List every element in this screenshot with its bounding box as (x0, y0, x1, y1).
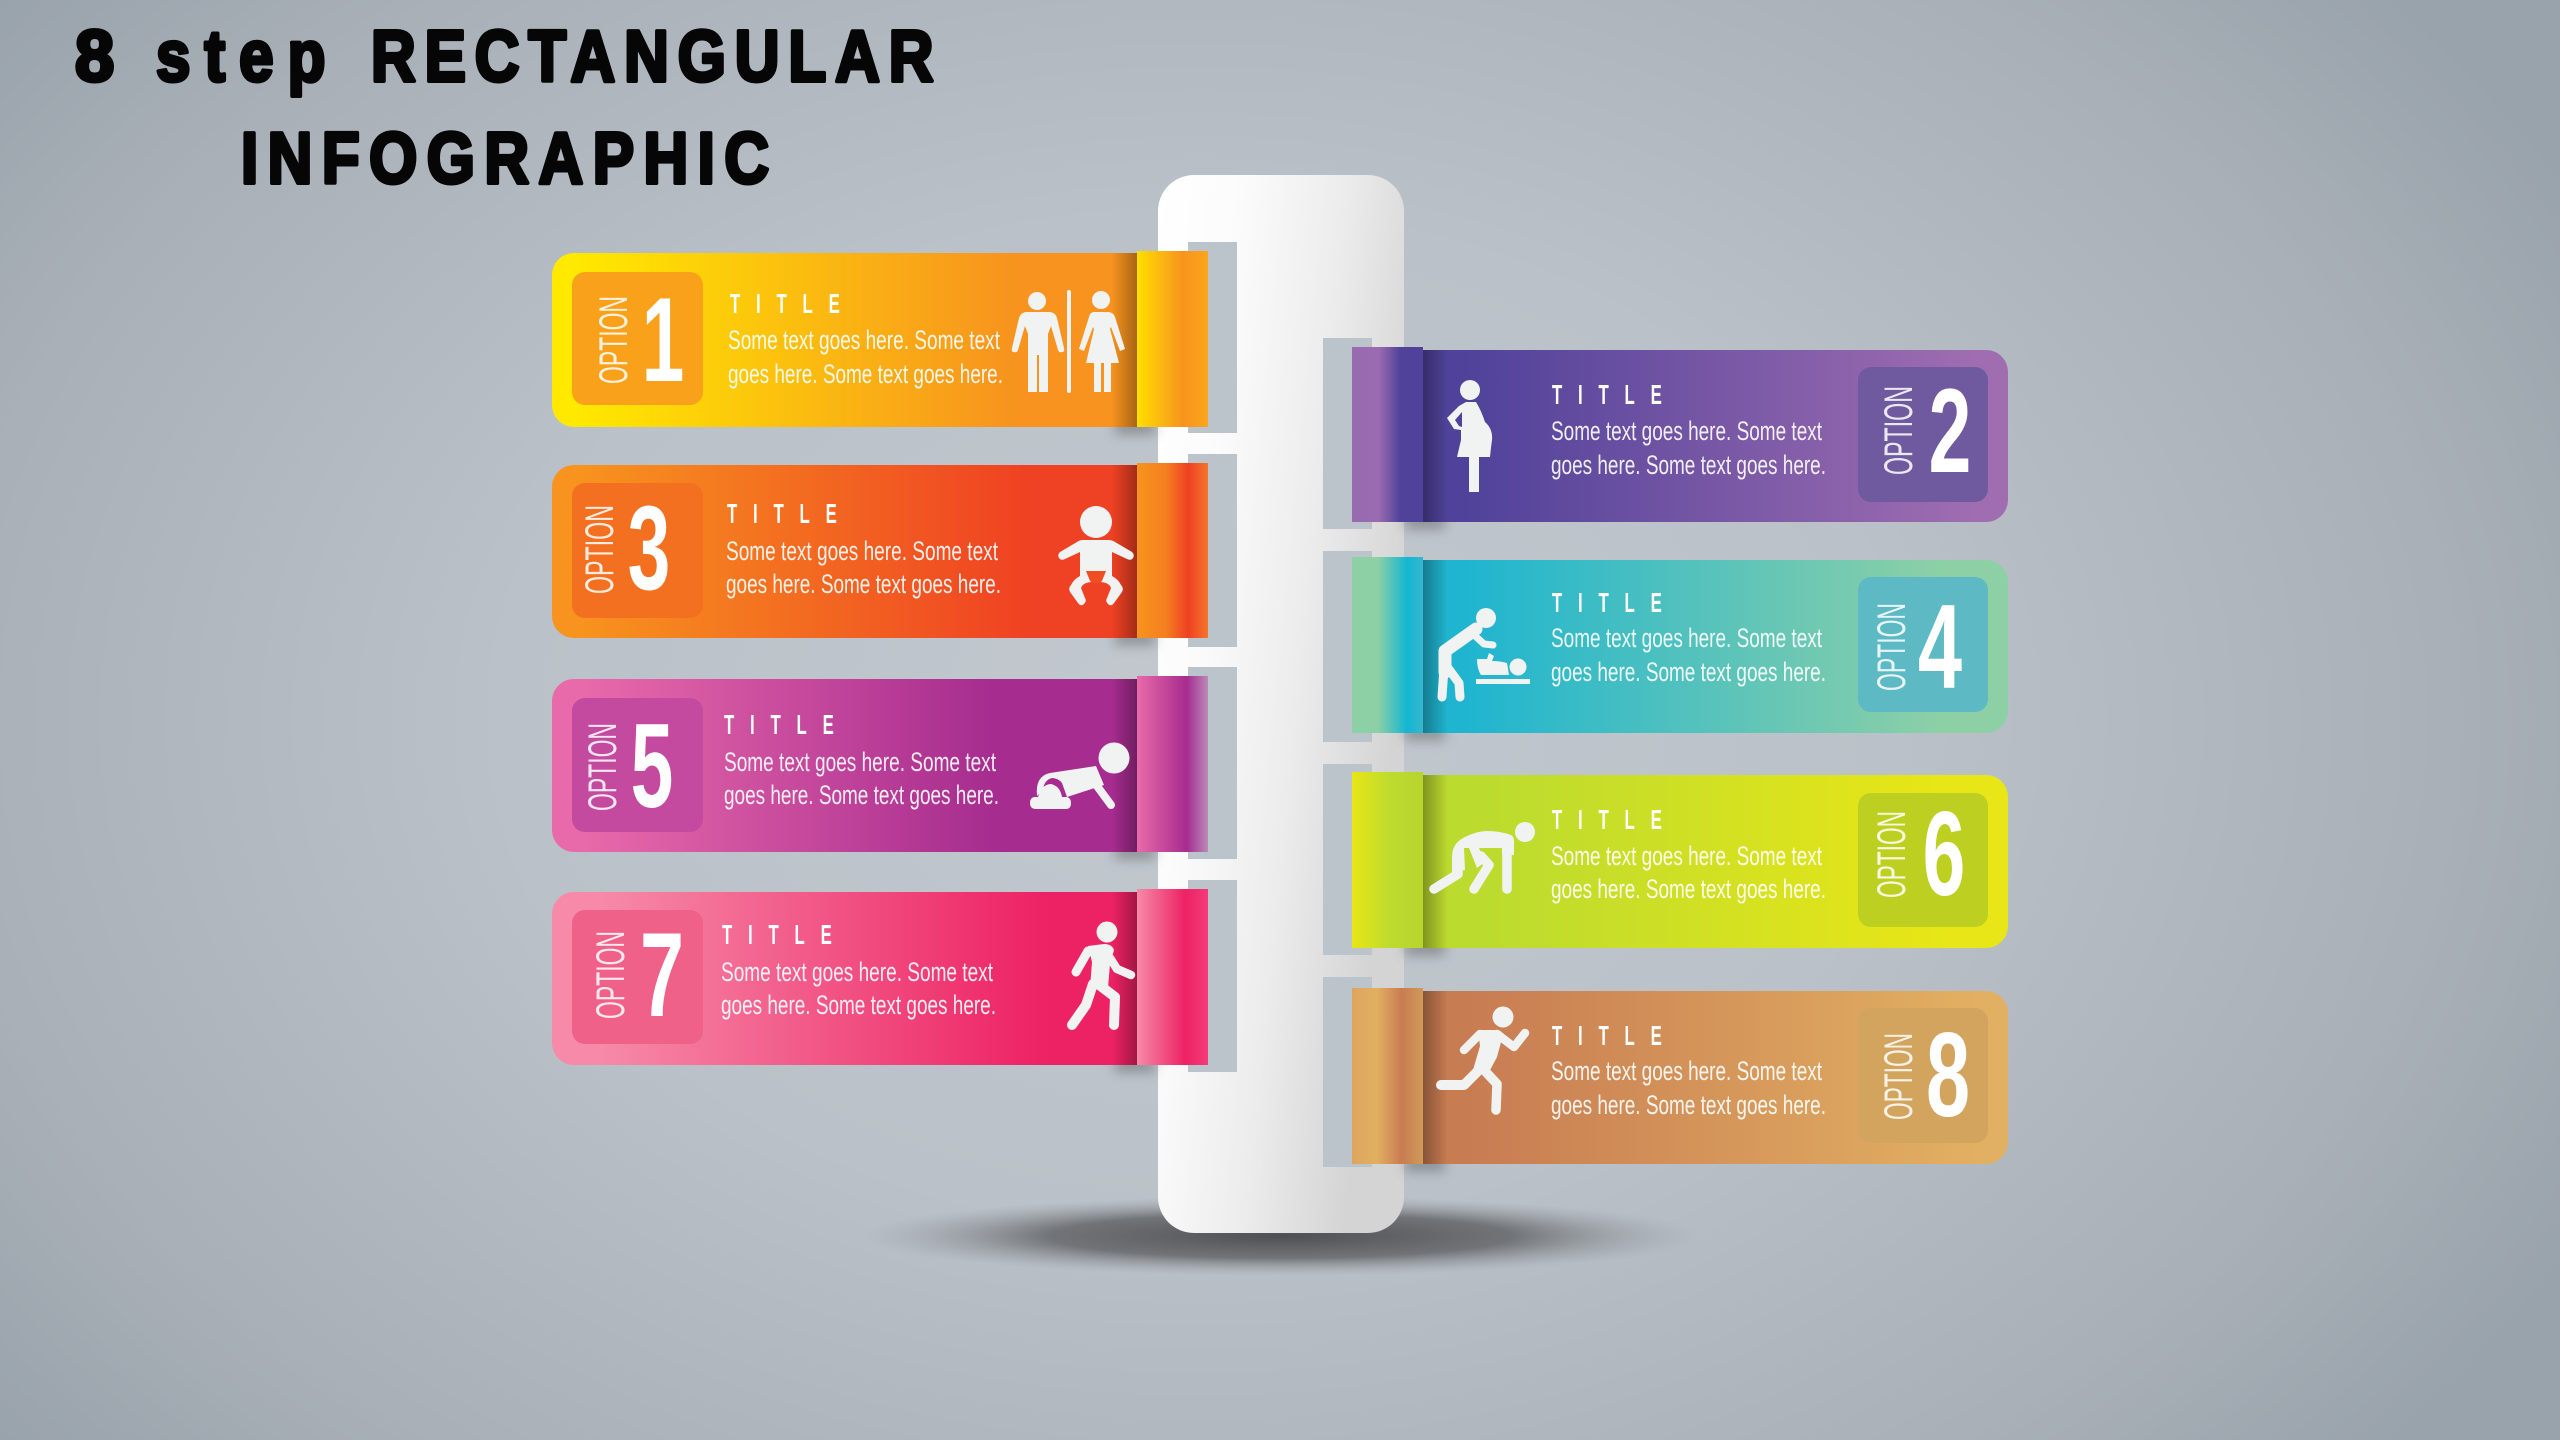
badge: 8 (1926, 1007, 1970, 1142)
panel: option 7 (552, 889, 1208, 1072)
fold (1352, 557, 1423, 733)
text block (728, 288, 1003, 389)
icon: running person (1441, 1006, 1525, 1110)
text block: TITLE (730, 288, 840, 319)
column ground shadow (861, 1196, 1701, 1276)
text block (1551, 804, 1826, 904)
badge: OPTION (1870, 811, 1914, 898)
text block: Some text goes here. Some text (721, 957, 993, 987)
badge (572, 907, 703, 1044)
badge: 7 (640, 907, 684, 1042)
fold (1137, 463, 1208, 638)
badge (1858, 1007, 1988, 1143)
badge: OPTION (581, 723, 625, 811)
title: 8 (75, 16, 114, 97)
icon: crawling baby (1030, 742, 1130, 809)
badge: 4 (1918, 579, 1962, 714)
text block: TITLE (727, 498, 837, 529)
badge: OPTION (1877, 386, 1921, 475)
title: RECTANGULAR (371, 17, 933, 97)
icon: baby in diaper (1058, 506, 1134, 605)
badge (1858, 788, 1988, 927)
panel: option 3 (552, 463, 1208, 645)
panel: option 6 (1352, 772, 2008, 955)
text block (1551, 379, 1826, 480)
text block: Some text goes here. Some text (1551, 623, 1822, 653)
text block: goes here. Some text goes here. (1551, 657, 1826, 687)
fold (1352, 772, 1423, 948)
text block: TITLE (722, 919, 832, 950)
badge: OPTION (592, 296, 636, 384)
text block: Some text goes here. Some text (1551, 1056, 1822, 1086)
panel: option 8 (1352, 988, 2008, 1171)
title (75, 16, 933, 199)
badge (572, 482, 703, 618)
text block: goes here. Some text goes here. (728, 359, 1003, 389)
text block: TITLE (1552, 379, 1662, 410)
text block: goes here. Some text goes here. (1551, 1090, 1826, 1120)
text block: goes here. Some text goes here. (726, 569, 1001, 599)
text block (721, 919, 996, 1020)
icon: pregnant woman (1447, 380, 1492, 492)
badge: OPTION (578, 505, 622, 594)
badge: 3 (628, 482, 670, 615)
text block: goes here. Some text goes here. (724, 780, 999, 810)
text block (724, 709, 999, 810)
text block: TITLE (1552, 587, 1662, 618)
fold (1137, 676, 1208, 852)
badge: 6 (1923, 788, 1965, 921)
panel: option 5 (552, 676, 1208, 859)
fold (1137, 889, 1208, 1065)
central white column with slots (1158, 175, 1404, 1233)
text block: TITLE (724, 709, 834, 740)
badge (572, 698, 703, 833)
text block (1551, 1020, 1826, 1120)
title: INFOGRAPHIC (241, 119, 769, 199)
badge: 1 (642, 274, 684, 407)
icon: parent changing baby (1442, 608, 1530, 697)
fold (1137, 251, 1208, 427)
text block: goes here. Some text goes here. (1551, 874, 1826, 904)
badge (1858, 365, 1988, 502)
text block (726, 498, 1001, 599)
badge: OPTION (589, 931, 633, 1019)
text block: TITLE (1552, 804, 1662, 835)
fold (1352, 988, 1423, 1164)
fold (1352, 347, 1423, 522)
panel: option 4 (1352, 557, 2008, 740)
icon: man and woman (1012, 290, 1125, 393)
text block: goes here. Some text goes here. (721, 990, 996, 1020)
text block (1551, 587, 1826, 687)
panel: option 1 (552, 251, 1208, 434)
badge (572, 272, 703, 407)
text block: Some text goes here. Some text (1551, 416, 1822, 446)
badge (1858, 577, 1988, 714)
icon: crawling adult (1434, 822, 1535, 889)
badge: 5 (631, 700, 673, 833)
badge: 2 (1929, 365, 1971, 498)
panel: option 2 (1352, 347, 2008, 529)
text block: Some text goes here. Some text (1551, 841, 1822, 871)
text block: goes here. Some text goes here. (1551, 450, 1826, 480)
text block: Some text goes here. Some text (726, 536, 998, 566)
text block: TITLE (1552, 1020, 1662, 1051)
icon: walking person (1072, 922, 1131, 1025)
text block: Some text goes here. Some text (724, 747, 996, 777)
badge: OPTION (1877, 1033, 1921, 1120)
badge: OPTION (1870, 603, 1914, 691)
title: step (156, 17, 325, 97)
text block: Some text goes here. Some text (728, 325, 1000, 355)
